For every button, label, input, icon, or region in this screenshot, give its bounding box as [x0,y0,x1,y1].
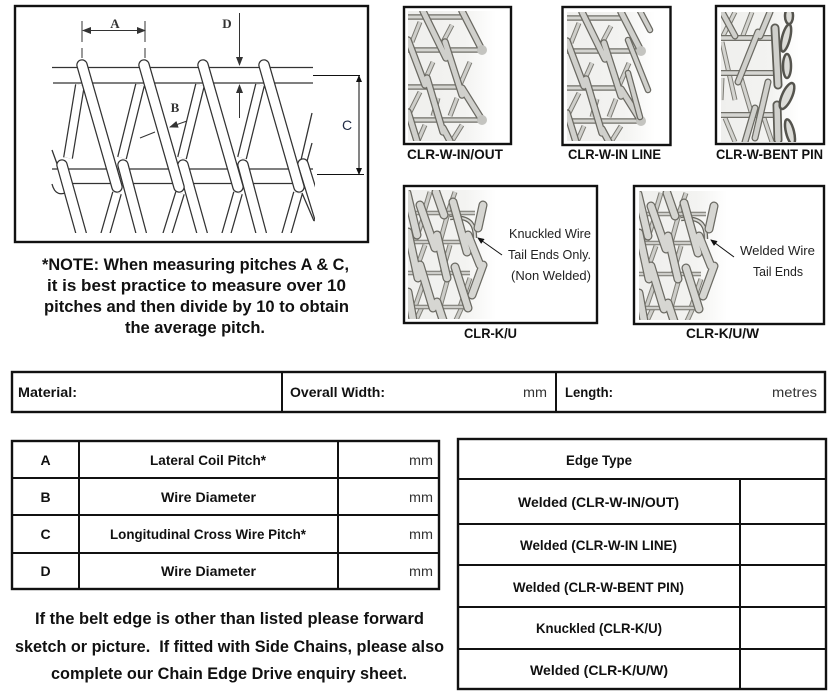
table: pitch dimensions: Lateral Coil Pitch* [150,452,267,468]
caption: CLR-K/U/W [686,325,760,341]
note text [42,255,349,337]
callout: knuckled wire: Knuckled Wire [509,226,591,241]
panel: measurement diagram [15,6,368,242]
callout: knuckled wire: (Non Welded) [511,268,591,283]
table: edge type: Welded (CLR-W-IN/OUT) [518,494,679,510]
table: pitch dimensions: Wire Diameter [161,489,257,505]
note text: the average pitch. [125,318,265,337]
text block: other belt edge note: If the belt edge is other than listed please forward [35,609,424,628]
text block: other belt edge note: complete our Chain Edge Drive enquiry sheet. [51,664,407,683]
photo: CLR-K/U [404,186,597,341]
text block: other belt edge note [15,609,444,683]
caption: CLR-W-BENT PIN [716,146,823,162]
dimension C [313,76,364,174]
table: material, width, length: Overall Width: [290,384,385,400]
table: pitch dimensions: B [40,489,51,505]
caption: CLR-K/U [464,325,517,341]
callout: welded wire: Welded Wire [740,243,815,258]
dimension B [140,100,187,138]
callout: knuckled wire [478,226,591,283]
side chain [778,12,796,142]
photo: CLR-W-IN/OUT [404,7,511,162]
table: material, width, length: mm [523,384,547,400]
photo: CLR-K/U/W [634,186,824,341]
table: pitch dimensions: mm [409,452,433,468]
table: pitch dimensions: Wire Diameter [161,563,257,579]
table: pitch dimensions: C [40,526,51,542]
dimension B: B [171,100,180,115]
callout: welded wire [711,240,815,279]
photo: CLR-W-BENT PIN [716,6,824,162]
table: pitch dimensions [12,441,439,589]
table: pitch dimensions: Longitudinal Cross Wire Pitch* [110,526,307,542]
caption: CLR-W-IN/OUT [407,146,503,162]
table: edge type: Welded (CLR-W-IN LINE) [520,537,677,553]
table: material, width, length [12,372,825,412]
callout: welded wire: Tail Ends [753,264,803,279]
table: edge type [458,439,826,689]
table: edge type: Welded (CLR-K/U/W) [530,662,668,678]
wire mesh drawing [52,65,325,240]
table: material, width, length: Length: [565,384,613,400]
table: pitch dimensions: mm [409,563,433,579]
dimension D [222,13,240,118]
text block: other belt edge note: sketch or picture. If fitted with Side Chains, please also [15,637,444,656]
dimension A: A [110,16,120,31]
table: pitch dimensions: D [40,563,51,579]
note text: it is best practice to measure over 10 [47,276,346,295]
note text: pitches and then divide by 10 to obtain [44,297,349,316]
dimension A [82,16,145,58]
table: pitch dimensions: A [40,452,51,468]
caption: CLR-W-IN LINE [568,146,661,162]
dimension D: D [222,16,232,31]
table: pitch dimensions: mm [409,489,433,505]
photo: CLR-W-IN LINE [562,7,670,162]
table: material, width, length: metres [772,384,817,400]
table: material, width, length: Material: [18,384,77,400]
callout: knuckled wire: Tail Ends Only. [508,247,591,262]
table: pitch dimensions: mm [409,526,433,542]
table: edge type: Edge Type [566,452,632,468]
table: edge type: Welded (CLR-W-BENT PIN) [513,579,684,595]
note text: *NOTE: When measuring pitches A & C, [42,255,349,274]
dimension C: C [342,117,352,133]
table: edge type: Knuckled (CLR-K/U) [536,620,662,636]
